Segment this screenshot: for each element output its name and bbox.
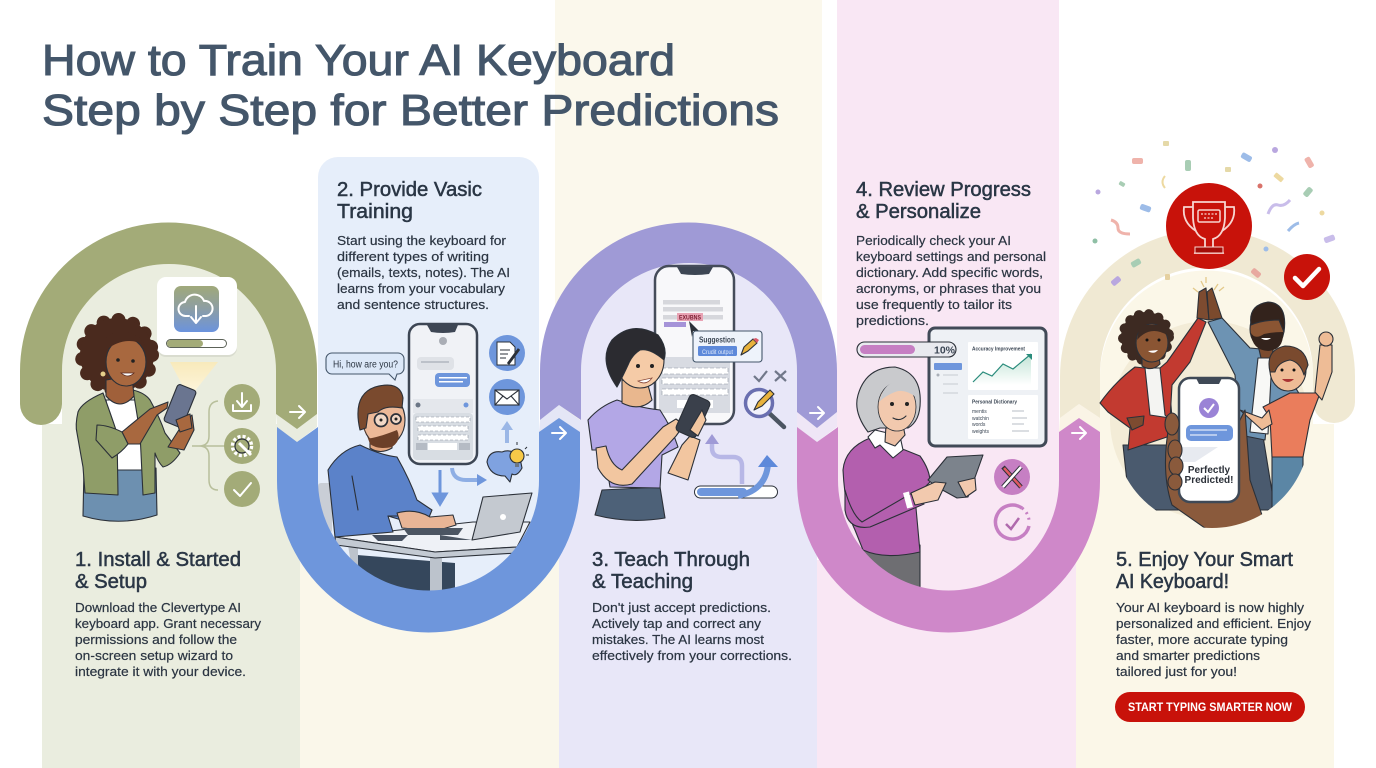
confetti: [1092, 141, 1336, 287]
arrow: phone to laptop: [434, 470, 446, 504]
arrow head lavender: [705, 434, 719, 444]
dashboard tablet: words: [972, 422, 986, 428]
card: app download: [157, 277, 237, 357]
body text: step 3: [592, 600, 792, 663]
body text: step 5: faster, more accurate typing: [1116, 632, 1288, 647]
heading: step 4: & Personalize: [856, 201, 981, 223]
heading: step 3: [592, 549, 750, 593]
body text: step 2: different types of writing: [337, 249, 489, 264]
illustration: woman with phone: [76, 318, 197, 521]
heading: step 2: Training: [337, 201, 413, 223]
icon: download: [224, 384, 260, 420]
icon: envelope: [489, 379, 525, 415]
panel background: step 3 lavender: [559, 263, 817, 768]
body text: step 4: [856, 233, 1046, 328]
speech bubble: [326, 353, 404, 380]
title: [42, 36, 779, 135]
body text: step 3: mistakes. The AI learns most: [592, 632, 764, 647]
panel background: step 2 cream column: [300, 500, 559, 768]
body text: step 3: Don't just accept predictions.: [592, 600, 771, 615]
phone: chat and keyboard: [409, 324, 477, 464]
dashboard tablet: mentis: [972, 409, 987, 415]
illustration: person with phone: [588, 329, 711, 520]
button: call to action: START TYPING SMARTER NOW: [1128, 702, 1292, 714]
heading: step 2: [337, 179, 482, 223]
body text: step 4: use frequently to tailor its: [856, 297, 1013, 312]
progress bar 10%: 10%: [934, 344, 956, 356]
icon: magnifier and pencil: [746, 390, 784, 427]
icon bracket: [192, 401, 240, 490]
cursor: [689, 321, 699, 337]
body text: step 4: predictions.: [856, 313, 929, 328]
title: How to Train Your AI Keyboard: [42, 36, 675, 85]
body text: step 2: learns from your vocabulary: [337, 281, 506, 296]
inner glow arch: [1110, 321, 1308, 519]
arch band: step 5: [1060, 230, 1355, 423]
body text: step 3: Actively tap and correct any: [592, 616, 762, 631]
arch band: step 1: [20, 223, 317, 429]
heading: step 5: AI Keyboard!: [1116, 571, 1229, 593]
arrow: step 2 to 3: [552, 427, 566, 439]
body text: step 1: keyboard app. Grant necessary: [75, 616, 261, 631]
heading: step 5: [1116, 549, 1293, 593]
arch band: step 3: [540, 222, 837, 428]
arrow: step 3 to 4: [810, 407, 824, 419]
heading: step 1: 1. Install & Started: [75, 549, 241, 571]
dashboard tablet: Accuracy Improvement: [972, 346, 1025, 352]
body text: step 4: acronyms, or phrases that you: [856, 281, 1041, 296]
chevron gap: step 3 to 4: [797, 412, 837, 442]
icon: progress ring: [995, 505, 1029, 539]
step 3 panel: [540, 222, 837, 663]
illustration: family high five: [1100, 277, 1333, 540]
body text: step 1: on-screen setup wizard to: [75, 648, 233, 663]
body text: step 2: (emails, texts, notes). The AI: [337, 265, 510, 280]
step 5 panel: [1060, 141, 1355, 722]
body text: step 1: integrate it with your device.: [75, 664, 246, 679]
button: call to action: [1115, 692, 1305, 722]
chevron gap: step 4 to 5: [1059, 404, 1100, 432]
chevron gap: step 1 to 2: [276, 414, 317, 442]
panel background: step 5: [1076, 271, 1334, 768]
phone: correction screen: [655, 266, 734, 424]
arrow head blue: [758, 455, 778, 467]
dashboard tablet: [929, 328, 1046, 446]
title: Step by Step for Better Predictions: [42, 86, 779, 135]
body text: step 2: Start using the keyboard for: [337, 233, 507, 248]
body text: step 5: Your AI keyboard is now highly: [1116, 600, 1305, 615]
panel background: step 2 blue card: [318, 157, 539, 590]
badge: check: [1284, 254, 1330, 300]
illustration: family high five: Predicted!: [1185, 475, 1233, 486]
dashboard tablet: watchin: [972, 416, 989, 422]
U band: step 2: [277, 418, 580, 633]
heading: step 3: 3. Teach Through: [592, 549, 750, 571]
suggestion popup: Crudit output: [702, 350, 733, 356]
suggestion popup: [693, 331, 762, 362]
step 2 panel: [277, 179, 580, 633]
body text: step 1: Download the Clevertype AI: [75, 600, 241, 615]
illustration: man at laptop: [318, 385, 532, 600]
arrow head: [477, 474, 487, 486]
step 1 panel: [20, 223, 317, 679]
phone: correction screen: EXUBNS: [679, 314, 702, 322]
body text: step 2: and sentence structures.: [337, 297, 489, 312]
suggestion popup: Suggestion: [699, 336, 735, 344]
arrow: phone to brain: [452, 468, 478, 480]
badge: trophy: [1166, 183, 1252, 269]
body text: step 5: personalized and efficient. Enjoy: [1116, 616, 1312, 631]
heading: step 1: [75, 549, 241, 593]
U band: step 4: [797, 418, 1100, 633]
icon: brain and light bulb: [487, 442, 529, 482]
icon: document and pen: [489, 335, 525, 371]
heading: step 5: 5. Enjoy Your Smart: [1116, 549, 1293, 571]
illustration: family high five: Perfectly: [1188, 465, 1231, 476]
body text: step 2: [337, 233, 510, 312]
arrow: brain to icons: [501, 421, 513, 443]
dashboard tablet: weights: [972, 429, 989, 435]
icon: check: [224, 471, 260, 507]
body text: step 5: tailored just for you!: [1116, 664, 1237, 679]
body text: step 1: [75, 600, 261, 679]
arrow: step 4 to 5: [1072, 427, 1086, 439]
speech bubble: Hi, how are you?: [333, 360, 398, 370]
icons: check and cross: [754, 371, 786, 381]
arrow: lavender path up: [712, 440, 742, 484]
heading: step 3: & Teaching: [592, 571, 693, 593]
body text: step 5: [1116, 600, 1312, 679]
illustration: older woman with tablet: [843, 367, 983, 600]
heading: step 4: [856, 179, 1031, 223]
step 4 panel: [797, 179, 1100, 633]
body text: step 4: keyboard settings and personal: [856, 249, 1046, 264]
progress bar 10%: [857, 342, 956, 357]
progress bar: [694, 486, 778, 498]
icon: tools: [994, 459, 1030, 495]
panel background: step 4 pink column: [817, 0, 1076, 768]
arrow: step 1 to 2: [290, 406, 305, 418]
body text: step 4: Periodically check your AI: [856, 233, 1011, 248]
body text: step 1: permissions and follow the: [75, 632, 237, 647]
panel background: step 1: [42, 264, 300, 768]
panel background: step 3 cream column: [555, 0, 822, 440]
chevron gap: step 2 to 3: [539, 405, 580, 432]
dashboard tablet: Personal Dictionary: [972, 400, 1018, 406]
arrow: blue curve up: [738, 464, 768, 496]
light beam: [170, 362, 218, 392]
icon: settings gear: [224, 428, 260, 464]
body text: step 5: and smarter predictions: [1116, 648, 1261, 663]
heading: step 1: & Setup: [75, 571, 147, 593]
heading: step 4: 4. Review Progress: [856, 179, 1031, 201]
body text: step 4: dictionary. Add specific words,: [856, 265, 1043, 280]
heading: step 2: 2. Provide Vasic: [337, 179, 482, 201]
body text: step 3: effectively from your corrections.: [592, 648, 792, 663]
